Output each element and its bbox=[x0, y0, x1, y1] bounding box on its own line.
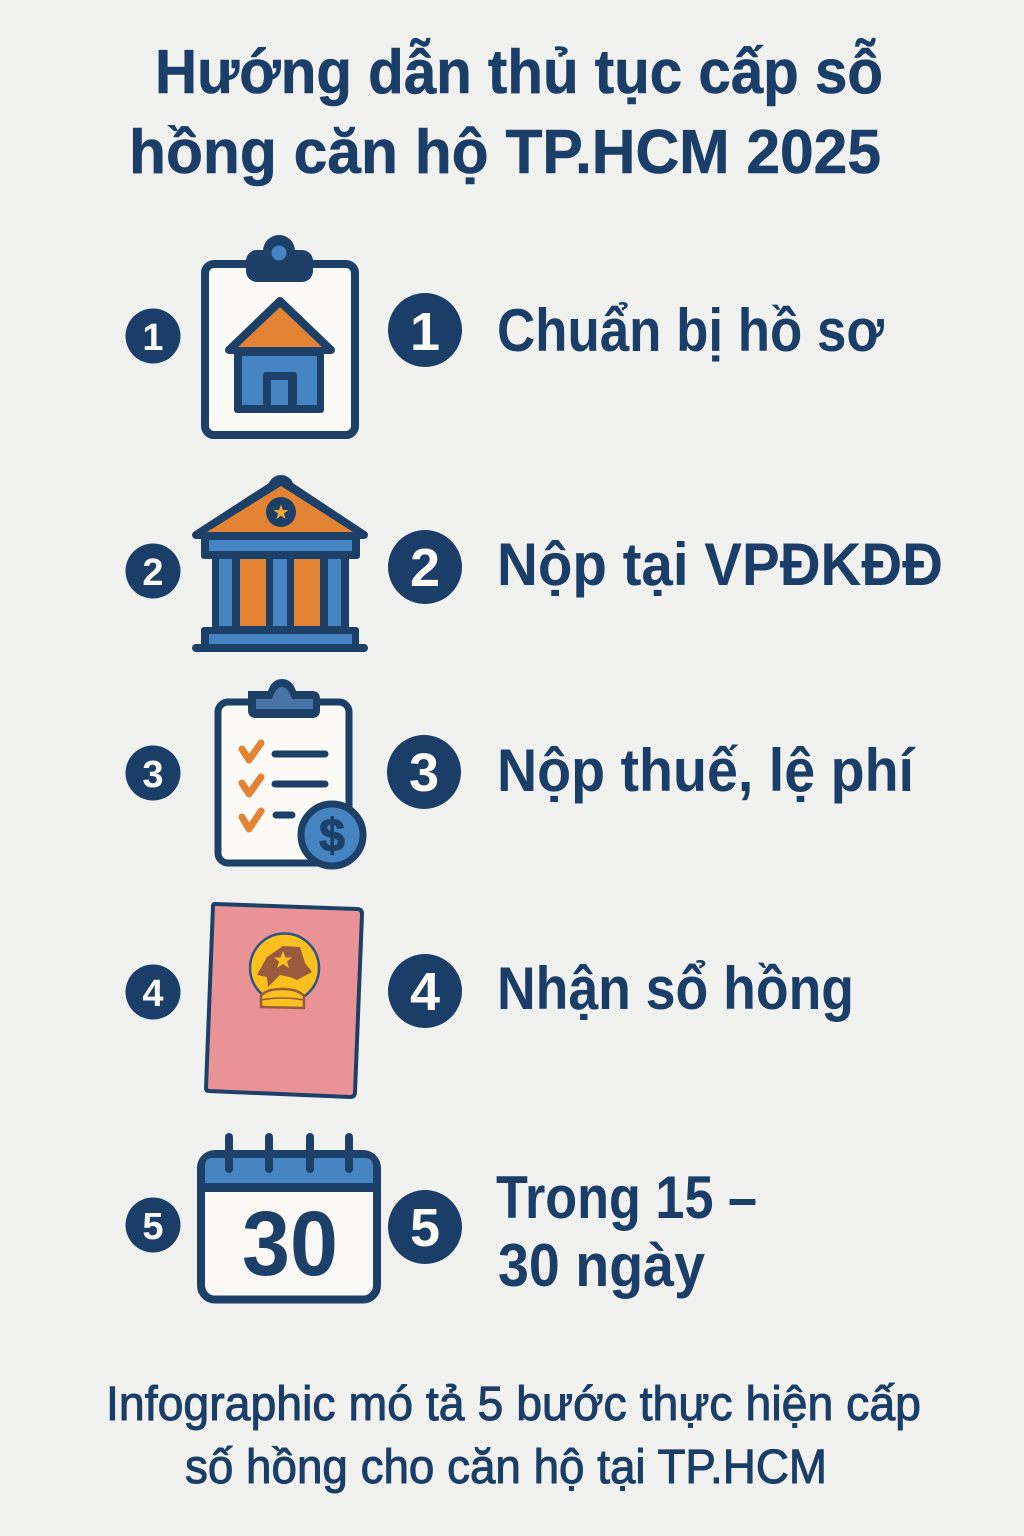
badge: small 5: 5 bbox=[142, 1206, 164, 1248]
label: step 3: Nộp thuế, lệ phí bbox=[497, 737, 916, 804]
badge: small 5 bbox=[126, 1198, 180, 1252]
badge: large 1: 1 bbox=[410, 302, 440, 362]
icon: checklist with dollar coin bbox=[218, 679, 363, 866]
label: step 1: Chuẩn bị hồ sơ bbox=[497, 297, 884, 364]
badge: small 4: 4 bbox=[142, 973, 164, 1015]
label: step 5: 30 ngày bbox=[498, 1232, 706, 1299]
icon: pink land certificate with emblem bbox=[206, 904, 362, 1097]
footer caption: Infographic mó tả 5 bước thực hiện cấp bbox=[106, 1378, 921, 1431]
badge: small 1 bbox=[126, 308, 180, 364]
label: step 5 bbox=[496, 1164, 757, 1299]
label: step 5: Trong 15 – bbox=[496, 1164, 757, 1231]
icon: checklist with dollar coin: $ bbox=[319, 809, 345, 861]
badge: small 1: 1 bbox=[142, 317, 164, 359]
title: Hướng dẫn thủ tục cấp sỗ bbox=[155, 38, 883, 107]
icon: government building bbox=[192, 475, 368, 652]
step 2 bbox=[126, 475, 943, 652]
badge: large 1 bbox=[388, 293, 462, 367]
step 3 bbox=[126, 679, 916, 866]
badge: small 2 bbox=[126, 544, 180, 598]
badge: small 2: 2 bbox=[142, 552, 164, 594]
icon: calendar showing 30: 30 bbox=[242, 1193, 338, 1295]
step 5 bbox=[126, 1137, 757, 1300]
badge: large 5: 5 bbox=[410, 1198, 440, 1258]
badge: large 4 bbox=[388, 954, 462, 1028]
label: step 4: Nhận sổ hồng bbox=[497, 955, 854, 1022]
title: hồng căn hộ TP.HCM 2025 bbox=[129, 118, 881, 187]
badge: small 4 bbox=[126, 964, 180, 1020]
step 4 bbox=[126, 904, 854, 1097]
badge: large 3: 3 bbox=[409, 743, 439, 803]
footer caption: số hồng cho căn hộ tại TP.HCM bbox=[185, 1441, 827, 1494]
label: step 2: Nộp tại VPĐKĐĐ bbox=[497, 531, 943, 598]
step 1 bbox=[126, 235, 884, 435]
icon: calendar showing 30 bbox=[201, 1137, 377, 1300]
badge: large 5 bbox=[388, 1190, 462, 1264]
footer caption bbox=[106, 1378, 921, 1494]
badge: small 3 bbox=[126, 746, 180, 800]
badge: small 3: 3 bbox=[142, 754, 164, 796]
badge: large 4: 4 bbox=[410, 962, 440, 1022]
title bbox=[129, 38, 883, 187]
badge: large 2 bbox=[388, 530, 462, 604]
badge: large 3 bbox=[387, 735, 461, 809]
badge: large 2: 2 bbox=[410, 538, 440, 598]
icon: clipboard with house bbox=[205, 235, 355, 435]
